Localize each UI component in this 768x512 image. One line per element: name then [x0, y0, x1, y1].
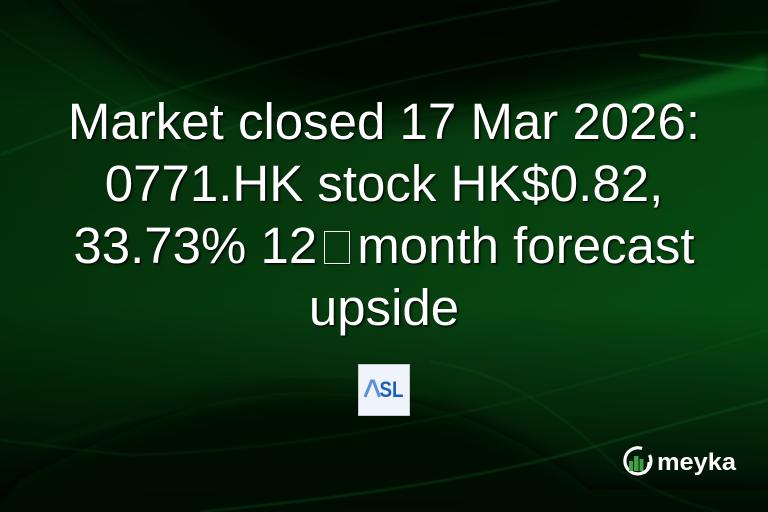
brand logo: meyka	[623, 446, 737, 476]
green swooshes	[0, 0, 560, 155]
title: 33.73% 12 month forecast	[73, 217, 695, 274]
icon: ASL company logo	[358, 364, 410, 416]
dark bottom region	[0, 392, 768, 512]
title	[68, 93, 700, 338]
title: Market closed 17 Mar 2026:	[68, 93, 700, 150]
title: 0771.HK stock HK$0.82,	[105, 155, 663, 212]
title: upside	[309, 279, 459, 336]
dark top region	[40, 0, 768, 122]
icon: ASL company logo: SL	[380, 377, 404, 402]
brand logo: meyka: meyka	[657, 449, 737, 476]
